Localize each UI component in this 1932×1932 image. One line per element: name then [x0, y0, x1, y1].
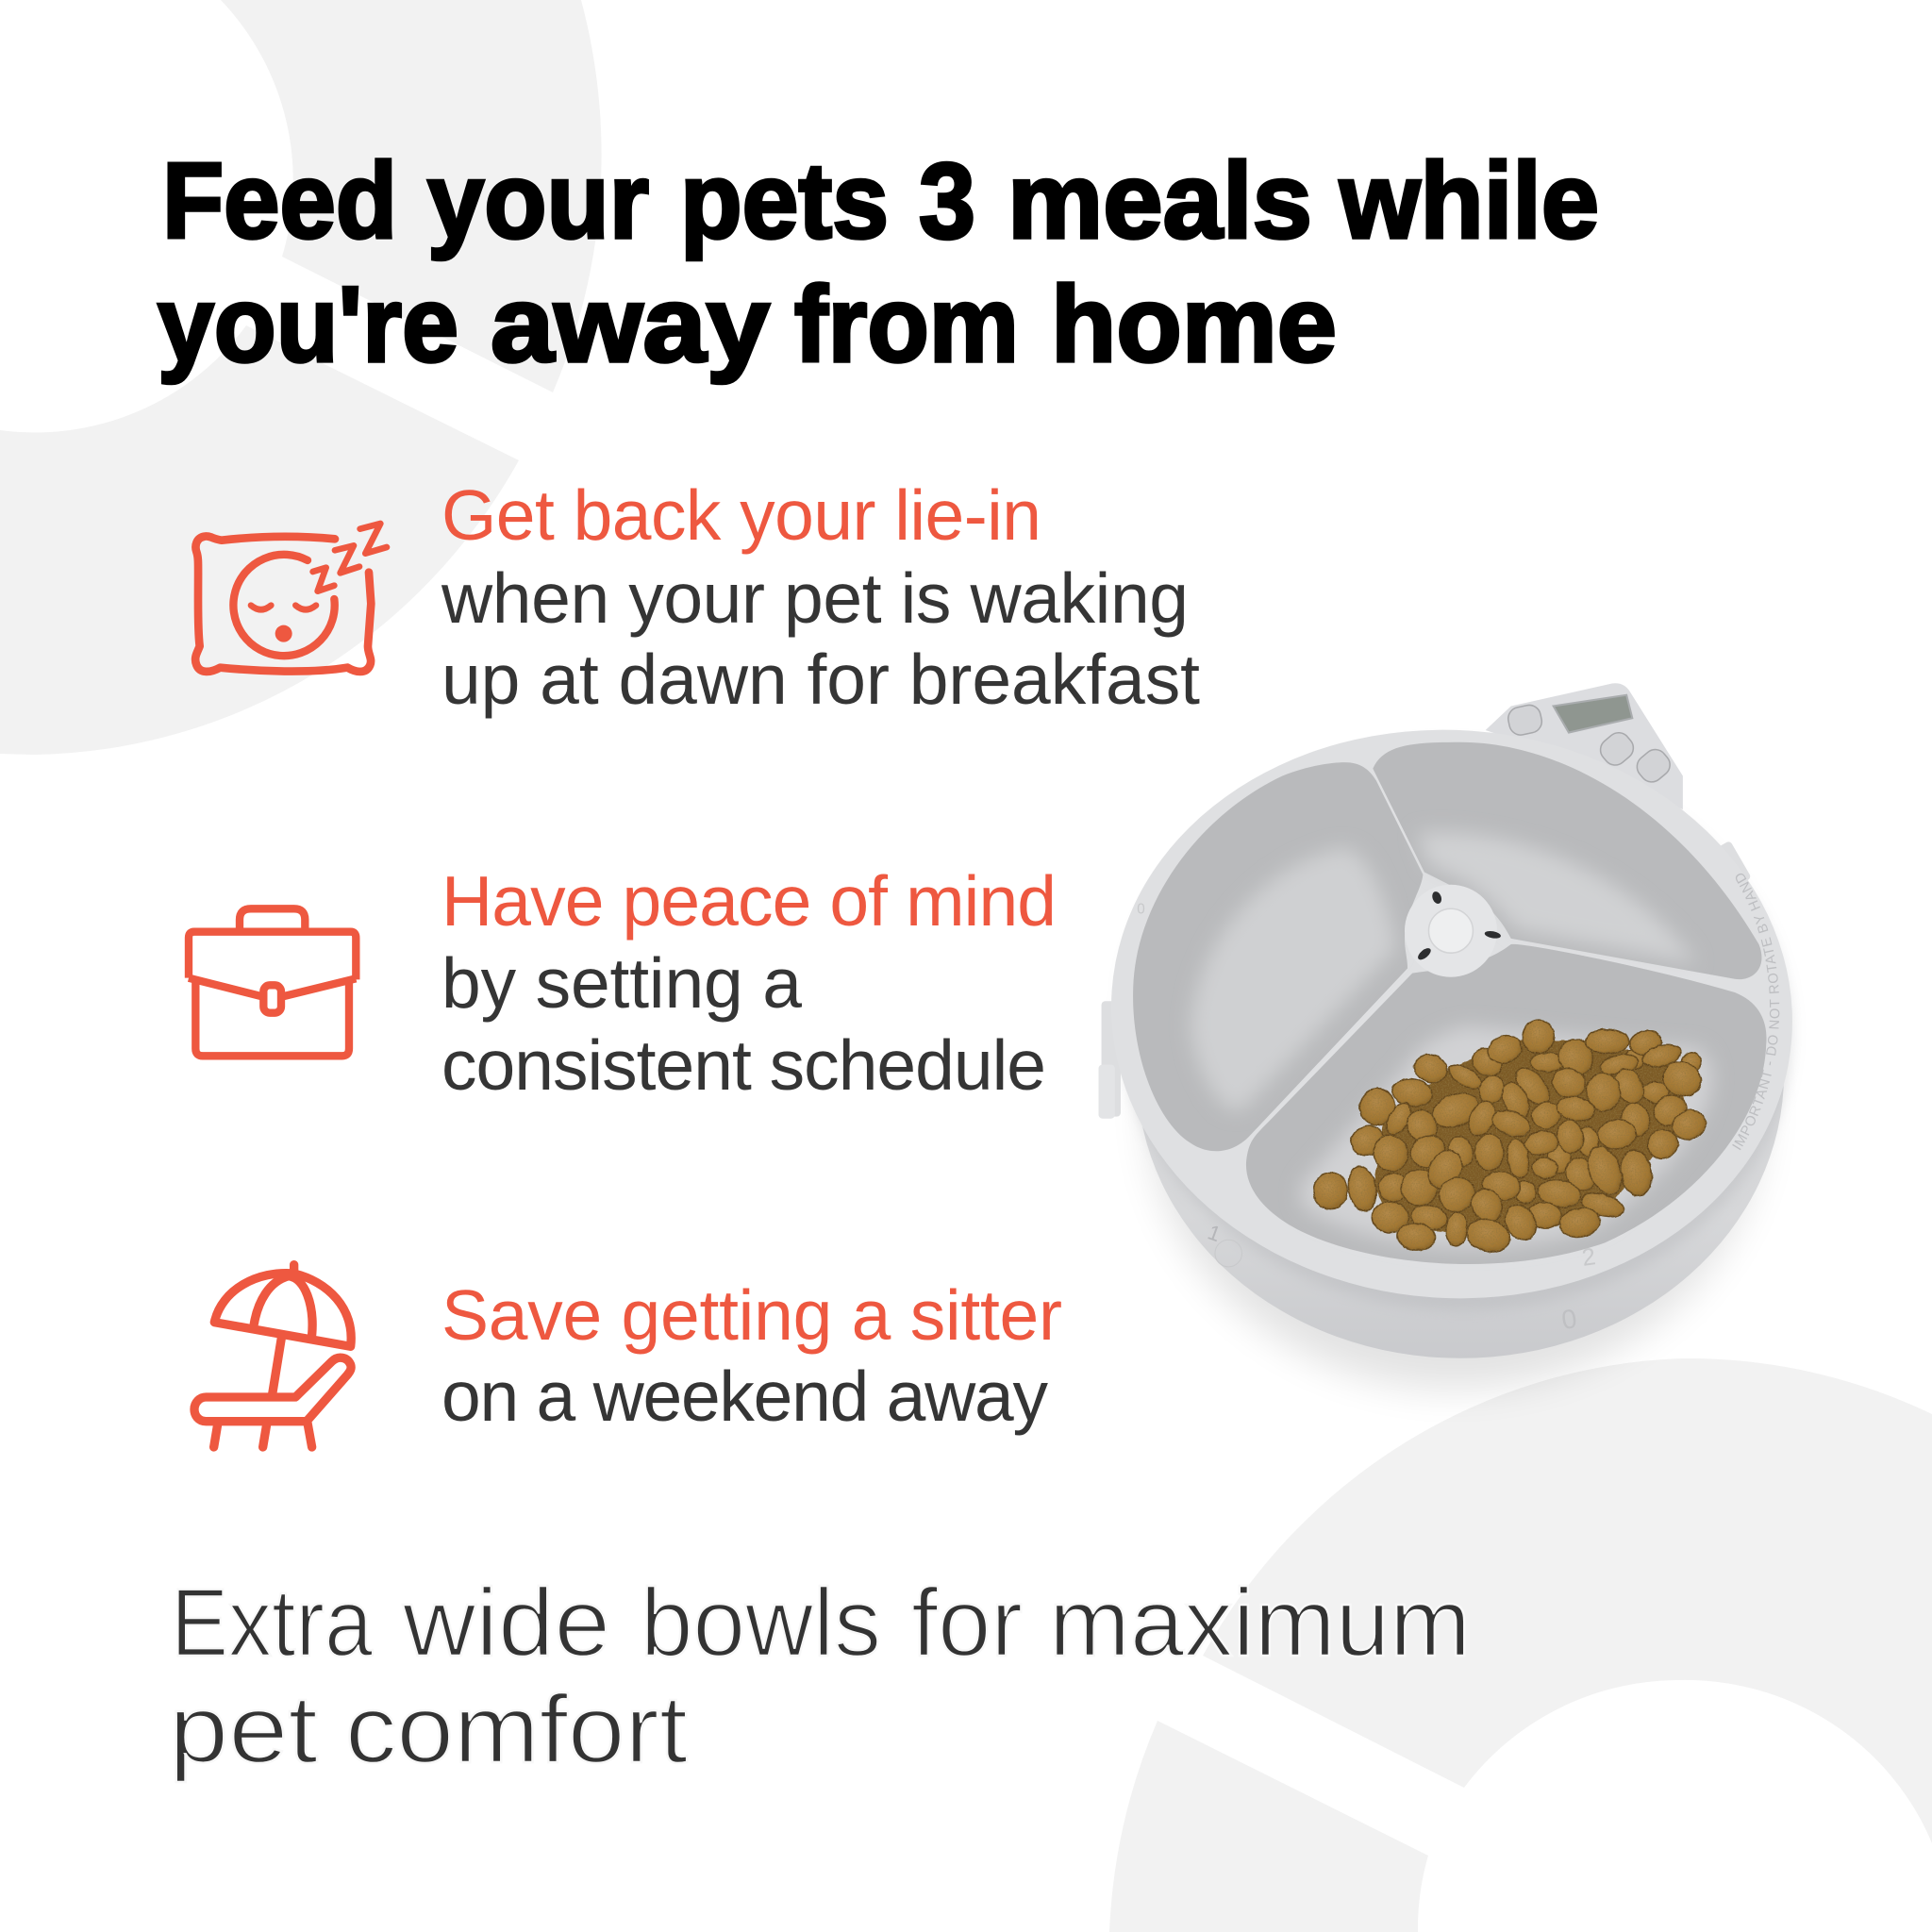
text block: sitter benefit: Save getting a sitter	[441, 1275, 1062, 1355]
bottom compartment	[1246, 944, 1767, 1264]
text block: sitter benefit: on a weekend away	[441, 1357, 1049, 1436]
text block: peace of mind benefit: Have peace of mind	[441, 861, 1057, 941]
title: from	[794, 265, 1019, 385]
footer statement: Extra	[171, 1569, 373, 1676]
background shape: top-left ring	[0, 0, 602, 755]
title: your	[427, 142, 649, 261]
text block: lie-in benefit	[441, 475, 1200, 719]
footer statement	[169, 1569, 1471, 1783]
left compartment	[1133, 762, 1423, 1151]
base dish: 0	[1559, 1304, 1579, 1336]
top compartment	[1373, 742, 1761, 979]
side tabs	[1098, 841, 1752, 1119]
footer statement: wide	[402, 1569, 610, 1676]
footer statement: maximum	[1049, 1569, 1471, 1676]
product photo: three-compartment feeder bowl with kibble	[1098, 683, 1796, 1398]
text block: peace of mind benefit	[441, 861, 1057, 1105]
footer statement: pet	[169, 1675, 318, 1783]
icon: beach umbrella and lounger	[194, 1265, 351, 1447]
tray rim	[1092, 708, 1811, 1321]
title: away	[491, 265, 770, 385]
title: while	[1339, 142, 1599, 261]
title: Feed	[162, 142, 397, 261]
rim lettering: 0	[1137, 901, 1145, 917]
title: home	[1051, 265, 1337, 385]
text block: lie-in benefit: Get back your lie-in	[441, 475, 1041, 555]
icon: sleeping face on pillow	[195, 524, 387, 672]
text block: sitter benefit	[441, 1275, 1062, 1436]
icon: briefcase	[189, 908, 356, 1056]
title	[158, 142, 1599, 385]
text block: peace of mind benefit: by setting a	[441, 943, 802, 1023]
control panel with LCD	[1486, 683, 1683, 809]
rim lettering	[1137, 874, 1779, 1272]
background shape: bottom-right ring	[1109, 1358, 1932, 1932]
central hub	[1405, 885, 1502, 977]
title: meals	[1008, 142, 1312, 261]
footer statement: bowls	[641, 1569, 881, 1676]
text block: peace of mind benefit: consistent schedule	[441, 1025, 1046, 1105]
text block: lie-in benefit: up at dawn for breakfast	[441, 640, 1200, 719]
title: you're	[158, 265, 458, 385]
title: 3	[919, 142, 975, 261]
title: pets	[680, 142, 889, 261]
kibble pile	[1314, 1016, 1710, 1257]
footer statement: comfort	[345, 1675, 688, 1783]
drop shadow	[1148, 826, 1764, 1390]
footer statement: for	[911, 1569, 1023, 1676]
base dish: 1	[1205, 1220, 1224, 1246]
rim lettering: IMPORTANT - DO NOT ROTATE BY HAND	[1732, 874, 1779, 1151]
base dish	[1100, 720, 1811, 1358]
text block: lie-in benefit: when your pet is waking	[441, 558, 1189, 638]
rim lettering: 2	[1580, 1243, 1597, 1272]
